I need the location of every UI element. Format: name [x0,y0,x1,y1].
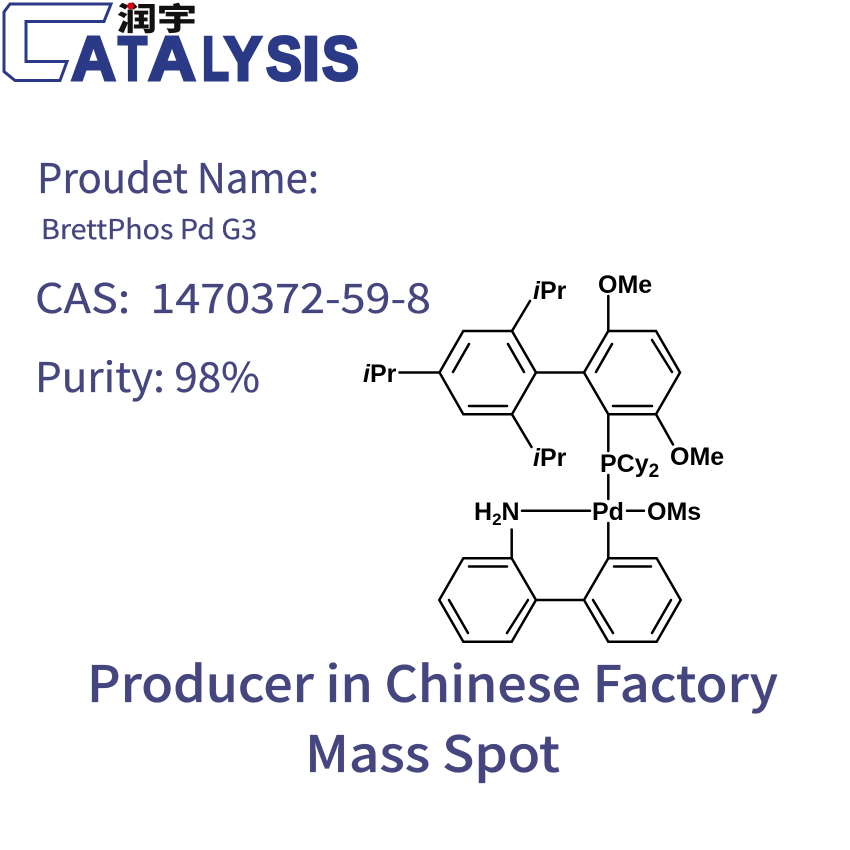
tagline: mass spot: Mass Spot [305,715,560,787]
atom labels: iPr [533,277,567,305]
chemical structure [363,271,724,642]
atom labels: 2 [492,510,502,529]
atom labels: OMe [598,271,652,299]
logo: wordmark: L [202,25,229,94]
logo: wordmark: S [322,25,359,94]
left aryl ring [440,331,536,414]
right aryl ring [584,331,680,414]
CAS number: CAS: 1470372-59-8 [35,265,431,325]
atom labels [363,271,724,529]
logo: wordmark: S [266,25,302,94]
tagline: producer: Producer in Chinese Factory [87,645,778,717]
product name heading: Proudet Name: [37,145,319,205]
logo: wordmark: A [148,25,196,94]
logo: wordmark [71,25,359,94]
atom labels: OMs [647,498,701,526]
atom labels: PCy [600,450,649,478]
atom labels: iPr [363,360,397,388]
lower right ring [536,558,681,642]
product name value: BrettPhos Pd G3 [41,208,257,247]
purity: Purity: 98% [35,344,260,404]
atom labels: H [474,498,492,526]
atom labels: iPr [533,444,567,472]
logo: wordmark: Y [224,25,262,94]
logo: wordmark: A [71,25,116,94]
logo: wordmark: T [118,25,147,94]
biaryl and substituent bonds [400,296,673,558]
atom labels: Pd [592,498,624,526]
atom labels: OMe [670,443,724,471]
logo: wordmark: I [302,25,320,94]
lower left ring [439,558,536,642]
logo: C outline [4,4,111,80]
logo [4,0,359,94]
atom labels: N [502,498,520,526]
atom labels: 2 [649,461,659,482]
